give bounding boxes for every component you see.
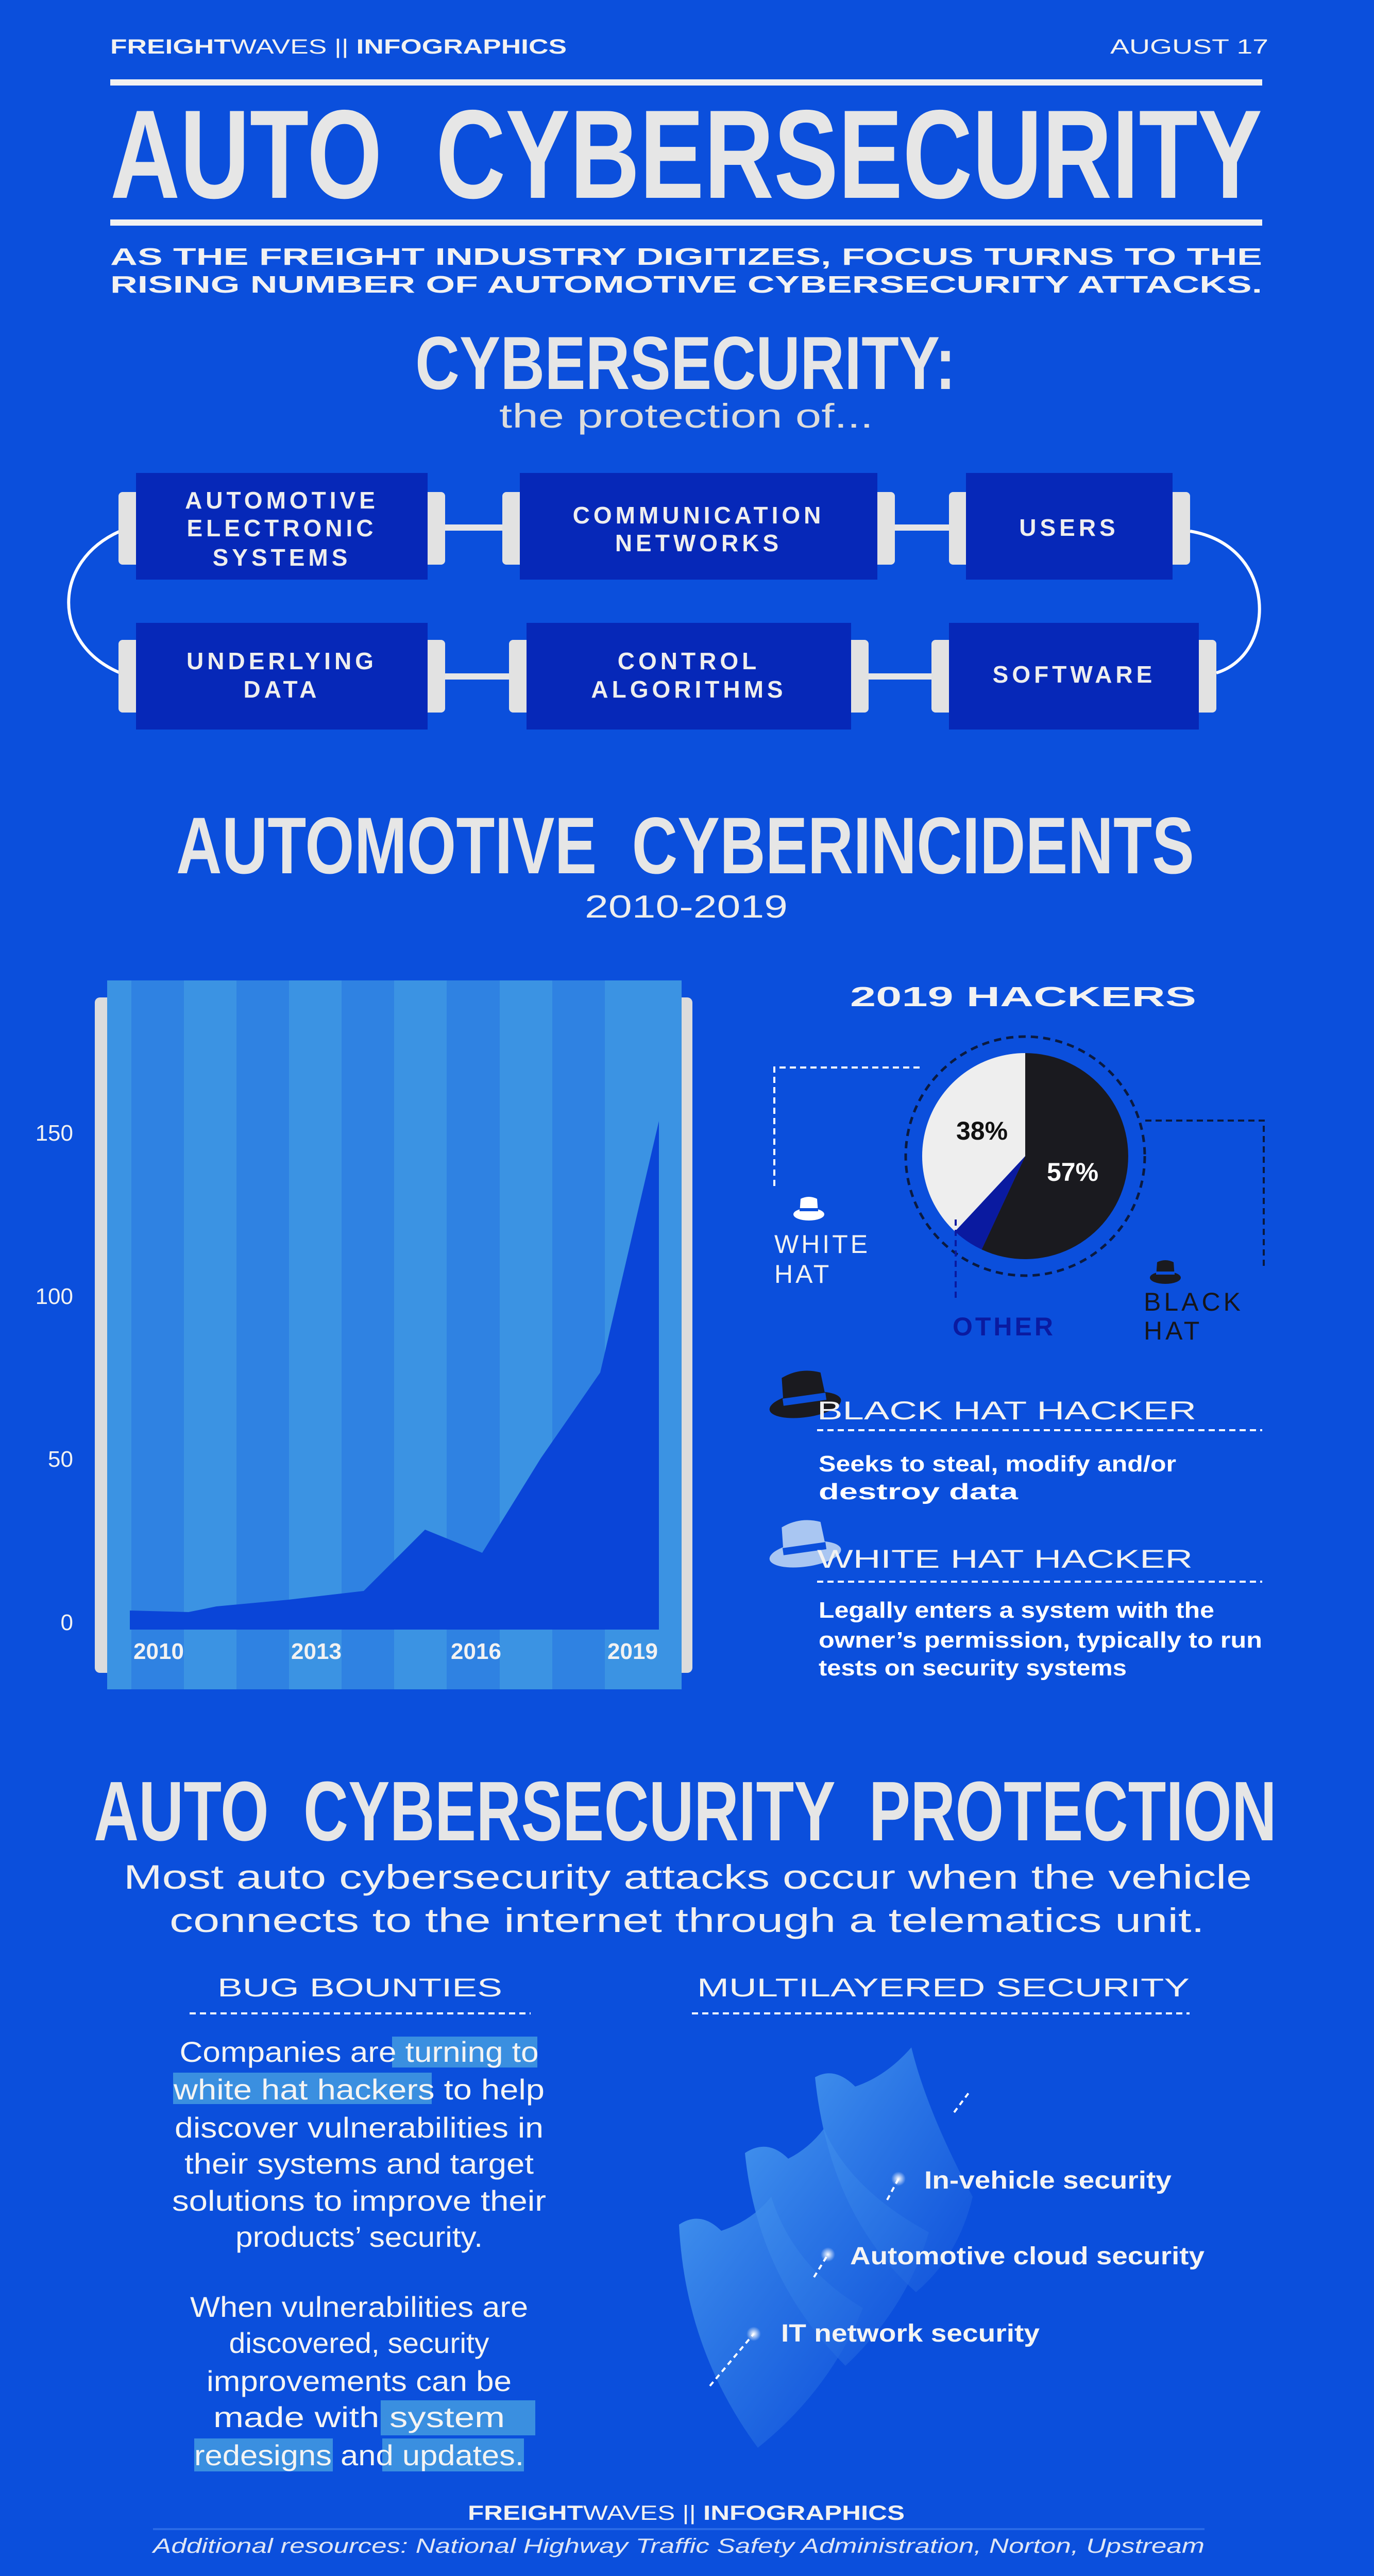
- legend: black hat: [1144, 1121, 1264, 1345]
- text block: bug bounties: white hat hackers to help: [173, 2073, 545, 2106]
- box: control algorithms: CONTROL: [618, 648, 760, 674]
- diagram: protection boxes: [69, 473, 1260, 730]
- text block: bug bounties: [172, 2036, 546, 2471]
- definition: white hat hacker: owner’s permission, typically to run: [819, 1628, 1262, 1653]
- text block: bug bounties: their systems and target: [184, 2147, 534, 2180]
- box: users: [949, 473, 1190, 580]
- box: software: [931, 623, 1216, 730]
- x axis labels: 2013: [291, 1639, 342, 1664]
- header date: AUGUST 17: [1110, 36, 1268, 58]
- definition: black hat hacker: Seeks to steal, modify and/or: [819, 1451, 1176, 1477]
- text block: bug bounties: redesigns and updates.: [194, 2439, 524, 2471]
- label: automotive cloud security: Automotive cloud security: [850, 2243, 1205, 2270]
- definition: white hat hacker: Legally enters a system with the: [819, 1598, 1214, 1623]
- box: software: SOFTWARE: [993, 661, 1156, 688]
- area series: [130, 1121, 659, 1630]
- legend: white hat: WHITE: [774, 1230, 870, 1259]
- header brand: FREIGHT WAVES || INFOGRAPHICS: [110, 36, 567, 58]
- box: automotive electronic systems: [118, 473, 445, 580]
- definition: black hat hacker: [765, 1366, 1262, 1504]
- y axis labels: 150: [36, 1121, 73, 1146]
- footer brand: FREIGHT WAVES || INFOGRAPHICS: [468, 2502, 905, 2524]
- footer sources: Additional resources: National Highway Traffic Safety Administration, Norton, Upstream: [151, 2535, 1205, 2557]
- text block: bug bounties: discover vulnerabilities in: [175, 2111, 544, 2144]
- intro text: Most auto cybersecurity attacks occur when the vehicle: [124, 1858, 1252, 1896]
- box: control algorithms: ALGORITHMS: [591, 676, 787, 703]
- heading: cybersecurity: CYBERSECURITY:: [415, 321, 956, 405]
- box: automotive electronic systems: ELECTRONIC: [186, 515, 377, 541]
- subtitle: [110, 243, 1262, 298]
- text block: bug bounties: products’ security.: [235, 2221, 483, 2253]
- x axis labels: [133, 1639, 658, 1664]
- y axis labels: 100: [36, 1284, 73, 1309]
- pie chart: 57%: [1047, 1158, 1098, 1187]
- column heading: bug bounties: BUG BOUNTIES: [217, 1973, 502, 2002]
- text block: bug bounties: When vulnerabilities are: [190, 2291, 528, 2323]
- column heading: multilayered security: MULTILAYERED SECURITY: [697, 1973, 1190, 2002]
- box: communication networks: COMMUNICATION: [573, 502, 824, 529]
- text block: bug bounties: made with system: [213, 2401, 505, 2433]
- intro text: connects to the internet through a telematics unit.: [169, 1901, 1205, 1939]
- illustration: layered shields: [679, 2047, 973, 2448]
- box: underlying data: DATA: [244, 676, 320, 703]
- text block: bug bounties: discovered, security: [229, 2327, 489, 2359]
- box: underlying data: [118, 623, 445, 730]
- x axis labels: 2019: [607, 1639, 658, 1664]
- y axis labels: 50: [48, 1447, 73, 1472]
- subtitle: RISING NUMBER OF AUTOMOTIVE CYBERSECURITY ATTACKS.: [110, 271, 1262, 298]
- definition: white hat hacker: [765, 1516, 1262, 1681]
- text block: bug bounties: improvements can be: [207, 2365, 512, 2397]
- box: automotive electronic systems: AUTOMOTIVE: [185, 487, 379, 514]
- definition: white hat hacker: WHITE HAT HACKER: [817, 1545, 1193, 1573]
- label: in-vehicle security: In-vehicle security: [924, 2167, 1172, 2194]
- y axis labels: 0: [61, 1610, 73, 1635]
- box: control algorithms: [509, 623, 869, 730]
- pie chart: [906, 1037, 1145, 1276]
- legend: white hat: HAT: [774, 1260, 832, 1289]
- y axis labels: [36, 1121, 73, 1635]
- text block: bug bounties: solutions to improve their: [172, 2184, 546, 2217]
- definition: white hat hacker: tests on security systems: [819, 1655, 1127, 1681]
- label: it network security: IT network security: [781, 2320, 1040, 2347]
- box: communication networks: [502, 473, 895, 580]
- text block: bug bounties: Companies are turning to: [179, 2036, 539, 2068]
- subheading years: 2010-2019: [585, 889, 788, 925]
- x axis labels: 2016: [451, 1639, 501, 1664]
- x axis labels: 2010: [133, 1639, 184, 1664]
- box: underlying data: UNDERLYING: [186, 648, 377, 674]
- area chart: [36, 980, 692, 1689]
- definition: black hat hacker: destroy data: [819, 1479, 1019, 1504]
- legend: black hat: HAT: [1144, 1316, 1202, 1345]
- heading: 2019 hackers: 2019 HACKERS: [850, 981, 1196, 1012]
- legend: black hat: BLACK: [1144, 1287, 1244, 1316]
- subtitle: AS THE FREIGHT INDUSTRY DIGITIZES, FOCUS TURNS TO THE: [110, 243, 1262, 270]
- pie chart: 38%: [956, 1116, 1008, 1145]
- box: communication networks: NETWORKS: [615, 530, 782, 556]
- definition: black hat hacker: BLACK HAT HACKER: [817, 1396, 1196, 1425]
- legend: other: OTHER: [953, 1312, 1056, 1341]
- box: automotive electronic systems: SYSTEMS: [213, 544, 351, 571]
- intro text: [124, 1858, 1252, 1939]
- legend: white hat: [774, 1067, 922, 1289]
- box: users: USERS: [1019, 514, 1119, 541]
- subheading: the protection of...: [499, 397, 873, 435]
